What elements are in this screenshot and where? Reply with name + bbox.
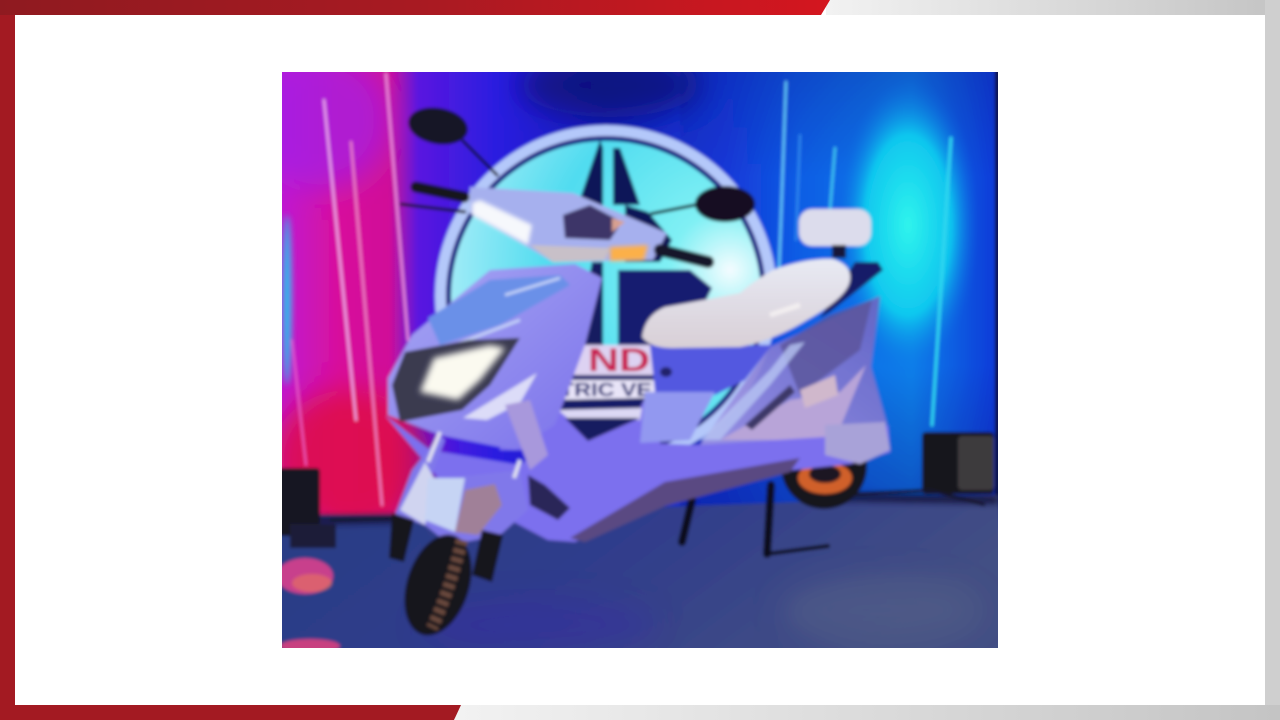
- under-seat panel: [640, 345, 772, 443]
- light strips: [292, 74, 951, 505]
- scooter: [385, 103, 890, 644]
- floorboard: [385, 415, 890, 542]
- stage floor: [270, 495, 1010, 660]
- front fork and fender: [395, 432, 570, 545]
- brand logo circle: [435, 125, 777, 467]
- brand logo circle: ND: [588, 342, 650, 378]
- front shield: [388, 264, 602, 470]
- photo: transparent electric scooter on stage: [282, 72, 998, 648]
- seat: [642, 209, 871, 348]
- front wheel: [389, 513, 503, 644]
- brand logo circle: TRIC VE: [560, 380, 652, 400]
- handlebar and headlight cowl: [400, 187, 708, 262]
- rear wheel: [780, 460, 869, 511]
- mirrors: [405, 103, 755, 222]
- stage lights and props: [276, 432, 994, 653]
- stands: [682, 485, 828, 554]
- rear body glass: [700, 262, 887, 445]
- backdrop wall: [282, 72, 998, 540]
